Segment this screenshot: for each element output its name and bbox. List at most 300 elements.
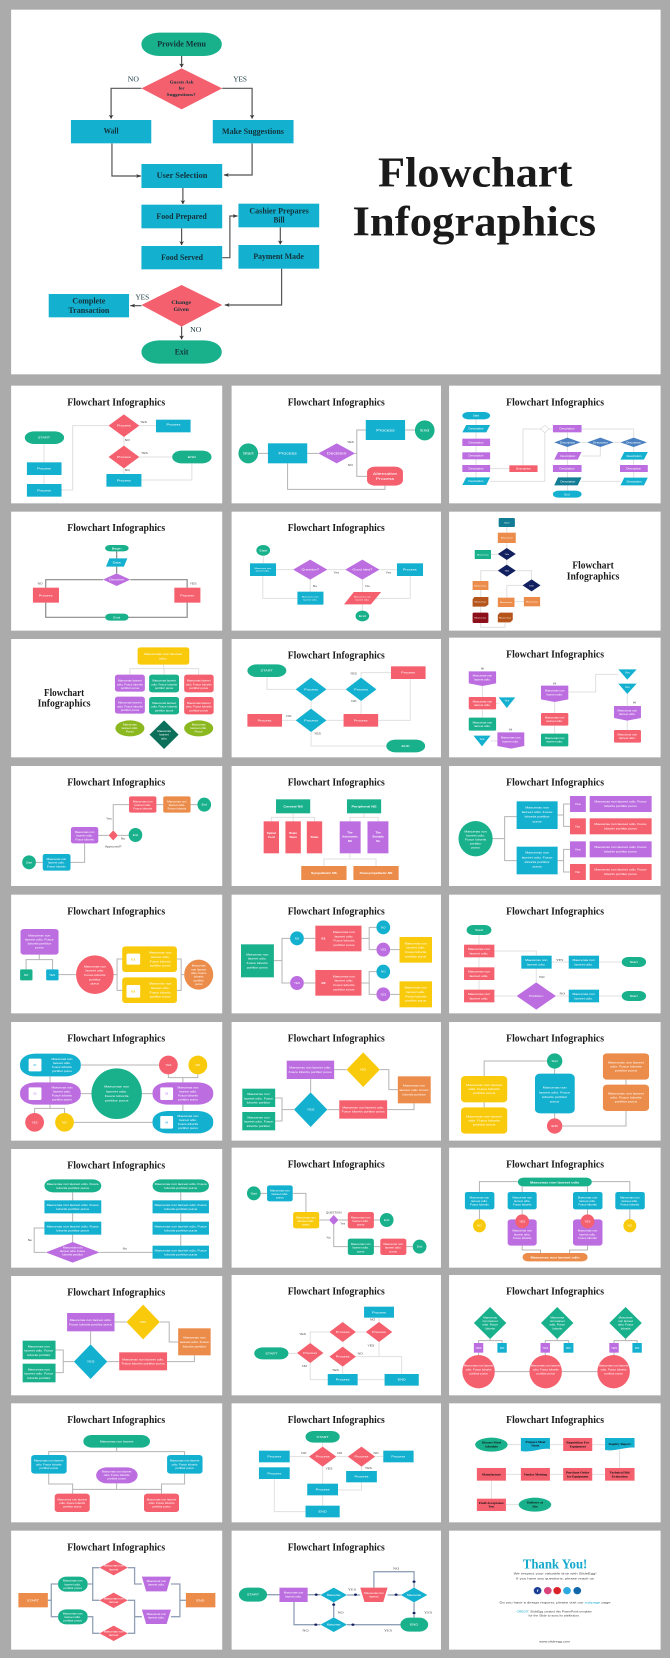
flow shapes: laoreet odio.: [514, 1233, 531, 1236]
flow shapes: End: [133, 833, 139, 837]
title: Flowchart Infographics: [288, 1034, 385, 1044]
flow shapes: Maecenas non: [149, 951, 172, 955]
flow shapes: Maecenas non: [573, 958, 595, 962]
flow shapes: Maecenas non: [133, 800, 153, 803]
flow shapes: porttitor purus: [52, 1069, 72, 1073]
flow shapes: Maecenas non: [618, 709, 638, 712]
flow shapes: Purchase Order: [566, 1471, 590, 1475]
flow shapes: [462, 412, 648, 498]
flow shapes: laoreet odio.: [466, 834, 485, 837]
flow shapes: odio. Fusce lobortis: [610, 1096, 642, 1100]
flow shapes: lobortis porttitor purus: [604, 850, 637, 853]
flow shapes: [115, 647, 214, 749]
flow shapes: Fusce lobortis: [178, 1122, 199, 1126]
flow shapes: Process: [336, 1330, 350, 1334]
flow shapes: Maecenas non: [545, 716, 565, 719]
flow shapes: 01: [131, 958, 136, 961]
title: Flowchart Infographics: [67, 1034, 166, 1044]
flow shapes: Delivery at: [527, 1501, 543, 1505]
title: Flowchart Infographics: [288, 651, 385, 661]
panel: slide 9 shields and triangles: [449, 638, 661, 757]
flow shapes: 01: [321, 937, 326, 941]
flow shapes: YES: [350, 672, 357, 676]
flow shapes: Hi: [633, 701, 636, 705]
flow shapes: Parasympathetic NS: [360, 871, 392, 875]
flow shapes: Maecenas non laoreet odio: [530, 1181, 579, 1184]
flow shapes: Maecenas: [483, 1316, 498, 1319]
node: Food Prepared: [141, 205, 222, 228]
flow shapes: START: [38, 436, 51, 440]
flow shapes: laoreet: [369, 1595, 379, 1599]
flow shapes: Maecenas non laoreet odio. Fusce: [594, 800, 647, 804]
flow shapes: Equipment: [570, 1445, 586, 1448]
flow shapes: porttitor: [89, 978, 101, 981]
flow shapes: Maecenas non: [247, 1092, 270, 1096]
flow shapes: laoreet odio.: [502, 740, 519, 743]
flow shapes: [20, 929, 213, 1003]
flow shapes: Problem: [529, 994, 544, 998]
flow shapes: Maecenas non: [183, 1336, 206, 1340]
flow shapes: laoreet odio.: [474, 703, 491, 707]
flow shapes: [242, 1052, 431, 1130]
node: Complete Transaction: Transaction: [68, 306, 110, 316]
connectors: [274, 927, 400, 994]
flow shapes: laoreet odio.: [619, 736, 636, 740]
flow shapes: Description: [626, 441, 642, 444]
flow shapes: Maecenas non: [28, 1345, 50, 1348]
node: Payment Made: Payment Made: [253, 252, 304, 262]
flow shapes: YES: [141, 451, 148, 455]
flow shapes: YES: [519, 1220, 525, 1223]
flow shapes: Maecenas non: [512, 1196, 533, 1199]
flow shapes: odio. Fusce lobortis: [172, 1463, 198, 1466]
title: Flowchart Infographics: [67, 1161, 166, 1171]
flow shapes: porttitor purus: [473, 1123, 496, 1126]
flow shapes: Process: [180, 594, 194, 597]
flow shapes: laoreet: [109, 1633, 119, 1637]
icons: social media: f: [537, 1589, 539, 1593]
flow shapes: purus: [35, 946, 44, 950]
flow shapes: odio. Fusce lobortis: [36, 1463, 62, 1466]
flow shapes: Description: [626, 467, 642, 471]
node: Cashier Prepares Bill: Cashier Prepares: [249, 206, 309, 216]
flow shapes: NO: [393, 1567, 399, 1570]
panel: slide 13 yellow cards and red ellipse: [11, 895, 222, 1013]
connectors: [491, 1445, 620, 1505]
flow shapes: Process: [117, 479, 131, 482]
flow shapes: laoreet odio.: [135, 803, 151, 807]
flow shapes: laoreet odio.: [64, 1583, 81, 1586]
flow shapes: odio.: [159, 657, 167, 660]
flow shapes: START: [27, 1599, 40, 1603]
flow shapes: Process: [278, 451, 298, 456]
flow shapes: Cord: [268, 835, 275, 839]
flow shapes: odio. Fusce lobortis: [186, 705, 212, 709]
flow shapes: laoreet: [109, 1568, 119, 1571]
flow shapes: [473, 518, 541, 623]
flow shapes: Maecenas non: [525, 851, 549, 855]
flow shapes: Maecenas non laoreet: [599, 1364, 629, 1368]
flow shapes: laoreet odio.: [622, 1199, 638, 1203]
flow shapes: YES: [347, 440, 354, 444]
flow shapes: laoreet odio.: [148, 1616, 165, 1620]
flow shapes: laoreet odio.: [148, 1583, 165, 1587]
flow shapes: porttitor purus: [333, 988, 355, 991]
flow shapes: Maecenas non: [464, 830, 487, 833]
credit lines: [517, 1610, 592, 1617]
flow shapes: purus: [195, 982, 203, 986]
flow shapes: YES: [314, 732, 321, 735]
flow shapes: porttitor purus: [105, 1099, 129, 1103]
node: Exit: [141, 340, 222, 364]
flow shapes: lobortis porttitor purus: [164, 1229, 198, 1232]
flow shapes: Question?: [301, 568, 319, 572]
flow shapes: Maecenas non: [149, 982, 172, 986]
flow shapes: laoreet odio.: [385, 1246, 402, 1250]
icons: social media: [534, 1587, 581, 1594]
flow shapes: NO: [125, 468, 131, 472]
decision: Guests Ask for Suggestions: Guests Ask: [170, 81, 194, 85]
title: Flowchart: [44, 688, 84, 699]
flow shapes: Fusce lobortis: [621, 1203, 640, 1207]
flow shapes: purus: [302, 1223, 310, 1227]
flow shapes: odio. Fusce: [482, 1323, 498, 1327]
flow shapes: Yes: [340, 1222, 346, 1225]
flow shapes: Fusce lobortis: [52, 1094, 73, 1097]
flow shapes: laoreet odio.: [48, 861, 65, 865]
flow shapes: Fusce lobortis: [150, 960, 171, 963]
flow shapes: Maecenas: [499, 617, 512, 619]
flow shapes: laoreet odio.: [53, 1090, 71, 1093]
flow shapes: Process: [258, 719, 272, 722]
flow shapes: Fusce lobortis: [465, 838, 487, 841]
flow shapes: Maecenas non: [470, 1196, 490, 1199]
flow shapes: laoreet odio.: [303, 599, 318, 601]
flow shapes: NO: [24, 973, 28, 977]
flow shapes: lobortis: [485, 1327, 496, 1330]
flow shapes: Fusce lobortis: [133, 807, 153, 811]
decision: Change Given: Change: [171, 301, 191, 306]
title: [38, 688, 91, 709]
flow shapes: Description: [560, 441, 575, 444]
flow shapes: Start: [630, 994, 638, 998]
flow shapes: [20, 1054, 213, 1133]
flow shapes: Maecenas non: [525, 806, 549, 809]
panel: slide 10 ascending approval flow: [11, 766, 222, 886]
flow shapes: Maecenas non laoreet odio: [530, 1256, 580, 1259]
flow shapes: YES: [380, 948, 387, 952]
flow shapes: NO: [337, 1451, 343, 1455]
flow shapes: Maecenas: [407, 1593, 422, 1597]
panel: slide 17 yes and no decisions: [232, 1022, 441, 1141]
flow shapes: Fusce lobortis: [513, 1203, 532, 1207]
flow shapes: laoreet odio.: [335, 935, 353, 938]
flow shapes: porttitor purus: [473, 1091, 496, 1095]
flow shapes: [458, 796, 652, 880]
heading: Flowchart Infographics: Flowchart: [378, 148, 573, 196]
flow shapes: purus: [550, 1100, 560, 1104]
flow shapes: Maecenas non: [104, 1085, 129, 1089]
connectors: [479, 1182, 630, 1253]
flow shapes: Good idea?: [352, 568, 372, 572]
flow shapes: YES: [49, 973, 55, 977]
flow shapes: 02: [33, 1092, 37, 1096]
flow shapes: Process: [336, 1355, 350, 1359]
panel: slide 11 nervous system hierarchy: [232, 766, 441, 886]
flow shapes: Hi: [553, 682, 557, 685]
flow shapes: Maecenas non laoreet: [608, 1092, 644, 1096]
flow shapes: porttitor purus: [63, 1619, 83, 1623]
flow shapes: laoreet odio.: [151, 986, 170, 990]
flow shapes: No: [575, 825, 580, 828]
panel: slide 12 tree from teal ellipse: [449, 766, 661, 886]
panel: slide 6 vertical flowchart with side title: [449, 512, 661, 631]
flow shapes: [465, 1178, 645, 1261]
flow shapes: Maecenas non: [104, 1630, 124, 1633]
panel: thank you slide: [449, 1531, 661, 1650]
flow shapes: Maecenas non: [63, 1579, 83, 1583]
flow shapes: NO: [286, 714, 292, 718]
flow shapes: END: [401, 744, 410, 748]
flow shapes: END: [398, 1378, 406, 1382]
connectors: [271, 813, 378, 866]
flow shapes: lobortis porttitor purus: [56, 1229, 90, 1232]
flow shapes: laoreet: [160, 733, 169, 737]
node: Wall: [71, 120, 151, 143]
flow shapes: No: [123, 1247, 127, 1250]
flow shapes: Maecenas non: [501, 736, 521, 739]
flow shapes: Maecenas non: [178, 1086, 199, 1089]
flow shapes: odio. Fusce lobortis: [117, 705, 144, 708]
flow shapes: NO: [381, 926, 386, 929]
flow shapes: odio. Fusce lobortis: [466, 1368, 492, 1372]
flow shapes: porttitor purus: [178, 1098, 198, 1101]
flow shapes: NO: [477, 1224, 482, 1228]
flow shapes: porttitor purus: [536, 1372, 556, 1376]
panel: slide 5 question flow: [232, 512, 441, 631]
flow shapes: odio. Fusce: [191, 971, 207, 975]
flow shapes: Process: [376, 428, 395, 432]
flow shapes: laoreet odio.: [272, 1192, 288, 1196]
connectors: [493, 804, 570, 872]
flow shapes: purus: [533, 820, 542, 823]
flow shapes: laoreet odio.: [256, 570, 270, 573]
flow shapes: porttitor purus: [405, 955, 427, 958]
flow shapes: Fusce lobortis porttitor purus: [289, 1070, 332, 1074]
flow shapes: START: [265, 1352, 278, 1355]
flow shapes: laoreet: [109, 1600, 119, 1604]
flow shapes: Requisition For: [566, 1441, 590, 1445]
connectors: [48, 1568, 186, 1633]
label YES: YES: [233, 75, 247, 83]
flow shapes: non laoreet: [483, 1319, 498, 1323]
flow shapes: Fusce lobortis: [405, 950, 427, 954]
flow shapes: Fusce lobortis: [333, 983, 355, 987]
flow shapes: odio. Fusce lobortis: [610, 1065, 642, 1068]
flow shapes: laoreet odio.: [179, 1118, 197, 1122]
flow shapes: NO: [360, 1068, 366, 1072]
flow shapes: YES: [140, 420, 147, 424]
flow shapes: Fusce lobortis: [470, 1203, 489, 1207]
flow shapes: Maecenas non laoreet: [57, 1498, 87, 1501]
panel: slide 3 multi-branch process: [449, 386, 661, 503]
flow shapes: [469, 667, 641, 749]
connectors: [481, 527, 532, 627]
flow shapes: Fusce: [126, 730, 135, 734]
flow shapes: Maecenas non: [51, 1057, 73, 1061]
flow shapes: Prepare Meal: [526, 1440, 545, 1444]
flow shapes: [31, 1435, 203, 1512]
flow shapes: non laoreet: [191, 968, 206, 971]
flow shapes: laoreet odio.: [76, 834, 93, 838]
connectors: [44, 426, 192, 490]
flow shapes: laoreet odio.: [470, 997, 489, 1000]
flow shapes: Maecenas: [123, 723, 138, 726]
connectors: [26, 955, 184, 990]
flow shapes: Maecenas non laoreet: [34, 1459, 64, 1463]
flow shapes: Maecenas non laoreet odio.: [122, 1358, 164, 1361]
node: User Selection: [141, 164, 222, 188]
decision: Change Given: [141, 285, 222, 327]
panel: slide 26 twin red decisions: [232, 1403, 441, 1522]
flow shapes: Fusce lobortis porttitor purus: [69, 1323, 113, 1326]
label YES: YES: [135, 292, 149, 301]
connectors: [288, 1318, 402, 1380]
flow shapes: Hi: [481, 667, 484, 670]
flow shapes: YES: [326, 1467, 332, 1471]
flow shapes: laoreet odio.: [169, 803, 185, 807]
flow shapes: Maecenas non laoreet: [466, 1083, 502, 1087]
flow shapes: porttitor purus: [63, 1586, 83, 1590]
flow shapes: laoreet odio.: [579, 1199, 596, 1203]
title: Flowchart Infographics: [67, 1288, 166, 1298]
flow shapes: porttitor purus: [121, 708, 140, 712]
flow shapes: START: [317, 1435, 330, 1439]
flow shapes: laoreet odio. Fusce: [24, 1349, 54, 1353]
title: Flowchart Infographics: [506, 778, 604, 788]
flow shapes: YES: [299, 1332, 306, 1336]
flow shapes: laoreet odio.: [470, 952, 489, 955]
panel: slide 25 top-down with purple centre: [11, 1403, 222, 1522]
flow shapes: Maecenas: [474, 618, 487, 620]
flow shapes: laoreet odio.: [406, 946, 425, 950]
flow shapes: laoreet odio.: [106, 1090, 127, 1093]
flow shapes: Process: [303, 1351, 317, 1355]
flow shapes: porttitor purus: [615, 1069, 638, 1072]
flow shapes: Maecenas non: [63, 1246, 83, 1249]
flow shapes: Process: [376, 477, 395, 481]
flow shapes: lobortis porttitor: [27, 1376, 51, 1380]
connectors: [130, 665, 199, 675]
panel: slide 22 yes and no decisions variant: [11, 1276, 222, 1395]
flow shapes: Title: [529, 585, 535, 587]
flow shapes: NO: [560, 992, 566, 995]
flow shapes: Start: [504, 522, 510, 524]
flow shapes: Maecenas laoreet: [187, 679, 211, 683]
flow shapes: Data: [113, 561, 121, 565]
flow shapes: [475, 1438, 635, 1512]
flow shapes: Description: [516, 467, 531, 471]
flow shapes: laoreet odio. Fusce: [25, 938, 54, 942]
flow shapes: Maecenas non: [104, 1597, 124, 1600]
flow shapes: YES: [384, 1629, 392, 1633]
flow shapes: [25, 414, 212, 497]
flow shapes: Maecenas non laoreet odio. Fusce: [155, 1249, 207, 1252]
flow shapes: Maecenas non: [47, 857, 67, 861]
flow shapes: laoreet odio.: [151, 955, 170, 959]
flow shapes: Maecenas: [477, 554, 490, 556]
flow shapes: Maecenas: [327, 1623, 341, 1627]
heading: Flowchart Infographics: [353, 148, 596, 245]
flow shapes: Maecenas: [501, 538, 514, 540]
connectors: [274, 1443, 383, 1512]
flow shapes: Stem: [289, 835, 297, 839]
flow shapes: Maecenas non laoreet: [100, 1440, 134, 1444]
flow shapes: Maecenas: [192, 723, 206, 726]
flow shapes: Start: [473, 414, 479, 418]
panel: hero flowchart slide: [11, 10, 661, 374]
flow shapes: lobortis porttitor: [28, 942, 51, 946]
arrow dots: [314, 1580, 416, 1626]
flow shapes: Maecenas non: [296, 1216, 316, 1219]
title: Flowchart Infographics: [288, 778, 385, 788]
flow shapes: Maecenas non: [147, 1612, 167, 1616]
flow shapes: Maecenas non laoreet odio. Fusce: [594, 868, 647, 872]
flow shapes: [264, 799, 399, 880]
connectors: [49, 1448, 185, 1494]
flow shapes: non laoreet: [550, 1319, 565, 1323]
flow shapes: NO: [358, 1352, 363, 1355]
flow shapes: Description: [560, 454, 576, 458]
decision: Guests Ask for Suggestions: [141, 68, 222, 109]
flow shapes: START: [261, 669, 274, 673]
flow shapes: END: [551, 1124, 558, 1128]
flow shapes: laoreet odio. Fusce: [522, 856, 553, 859]
flow shapes: Process: [372, 1311, 386, 1314]
connectors: [482, 674, 627, 741]
flow shapes: Maecenas non: [618, 733, 638, 736]
flow shapes: End: [564, 493, 570, 496]
flow shapes: Process: [355, 1475, 369, 1479]
flow shapes: lobortis porttitor: [525, 815, 551, 819]
node: Wall: Wall: [104, 127, 119, 136]
flow shapes: Autonomic: [342, 835, 358, 839]
flow shapes: Maecenas non laoreet odio.: [70, 1318, 112, 1322]
flow shapes: Maecenas: [474, 585, 487, 587]
flow shapes: Yes: [504, 699, 510, 703]
flow shapes: lobortis porttitor: [247, 1124, 270, 1128]
node: Cashier Prepares Bill: Bill: [273, 216, 285, 225]
flow shapes: Maecenas non: [147, 1579, 167, 1583]
heading: Flowchart Infographics: Infographics: [353, 197, 596, 245]
flow shapes: Maecenas non: [302, 597, 319, 599]
flow shapes: Process: [267, 1455, 282, 1459]
flow shapes: [239, 1567, 432, 1633]
flow shapes: Yes: [334, 571, 340, 575]
flow shapes: purus: [389, 1250, 398, 1253]
flow shapes: Maecenas non: [333, 975, 355, 978]
node: Food Prepared: Food Prepared: [156, 212, 207, 222]
flow shapes: lobortis porttitor purus: [56, 1186, 90, 1190]
title: Flowchart Infographics: [67, 1415, 166, 1426]
flow shapes: Description: [469, 454, 484, 458]
flow shapes: porttitor purus: [190, 686, 209, 690]
flow shapes: lobortis porttitor: [247, 1101, 270, 1105]
flow shapes: lobortis porttitor: [183, 1345, 206, 1348]
flow shapes: for Equipment: [567, 1475, 588, 1478]
flow shapes: laoreet odio.: [190, 726, 207, 730]
flow shapes: NO: [38, 582, 43, 585]
